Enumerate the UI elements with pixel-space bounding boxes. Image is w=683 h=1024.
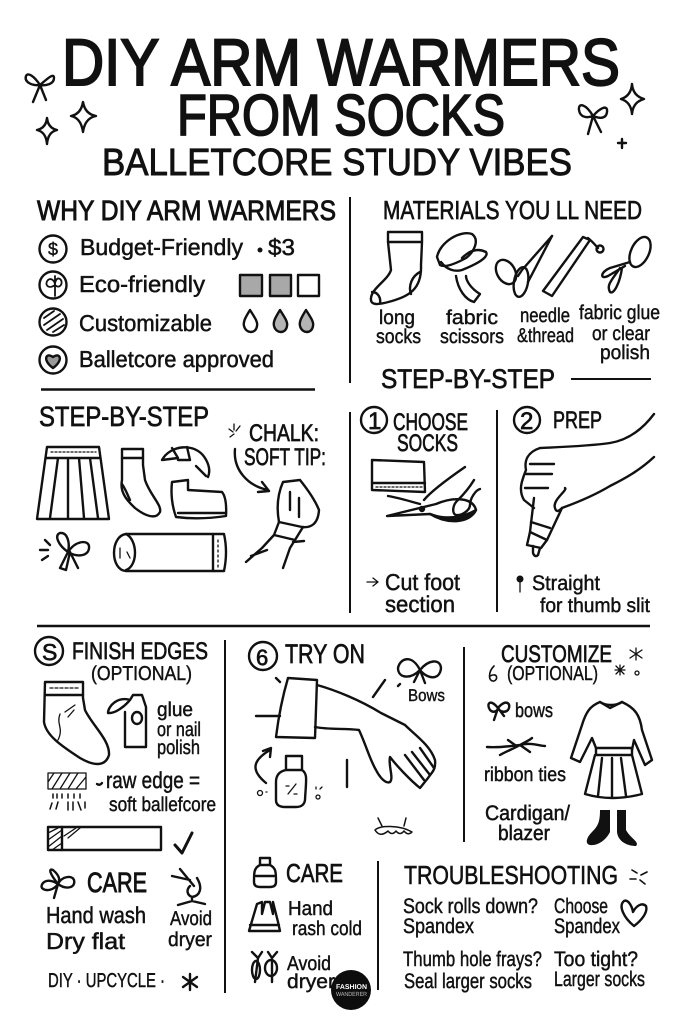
panel: step 6 try on — [249, 639, 445, 834]
heading: customize — [490, 641, 642, 685]
panel: step 2 prep — [514, 407, 654, 617]
text: avoid dryer middle: dryer — [287, 971, 335, 993]
icon: chalk note — [229, 420, 326, 471]
footer tag: diy upcycle: DIY · UPCYCLE · — [48, 970, 165, 992]
icon: sock outline — [122, 449, 160, 516]
icon: dots — [258, 787, 322, 799]
row: eco-friendly — [40, 271, 319, 298]
icon: hand squeezing bottle — [521, 414, 654, 556]
title: DIY ARM WARMERS — [62, 25, 620, 99]
badge: 5: S — [42, 639, 57, 665]
text: hand wash cold — [288, 898, 362, 940]
icon: bottle — [254, 858, 276, 887]
row: customizable — [40, 308, 313, 336]
icon: drying figure — [172, 869, 205, 905]
illustration: arm with warmer — [256, 678, 435, 788]
item: bows — [488, 700, 553, 722]
panel: step 5 finish edges — [35, 637, 216, 992]
icon: black socks — [587, 810, 637, 846]
text: raw edge: soft ballefcore — [109, 794, 216, 816]
text: sock rolls down — [403, 895, 538, 938]
labels: materials: long — [379, 307, 415, 329]
row: budget-friendly: $3 — [268, 234, 295, 260]
text: hand wash dry flat — [46, 902, 146, 954]
icon: hangers — [252, 952, 277, 982]
row: balletcore approved: Balletcore approved — [79, 346, 274, 372]
logo: fashion wanderer: WANDERER — [336, 991, 368, 998]
labels: materials: or clear — [592, 323, 650, 345]
label: ribbon ties: ribbon ties — [484, 764, 566, 786]
icon: nail polish bottle — [276, 756, 306, 807]
icon: rolled sock — [114, 534, 226, 571]
text: choose spandex: Spandex — [554, 915, 620, 938]
heading: choose socks: CHOOSE — [393, 409, 468, 436]
icon: scissors and hand — [387, 467, 480, 521]
panel: why diy arm warmers — [37, 195, 336, 374]
text: too tight: Too tight? — [554, 948, 638, 971]
icon: finished sleeve — [48, 827, 161, 850]
text: cut foot section: Cut foot — [385, 569, 461, 595]
badge: 6 — [249, 642, 277, 670]
badge: 2 — [514, 407, 540, 435]
text: straight for thumb slit — [516, 572, 650, 617]
heading: finish edges — [72, 638, 208, 685]
heading: step-by-step right: STEP-BY-STEP — [381, 364, 555, 394]
icon: cut sock piece — [372, 460, 425, 492]
badge: 2: 2 — [520, 408, 533, 435]
text: straight for thumb slit: Straight — [532, 572, 600, 595]
text: too tight — [554, 948, 645, 991]
icon: bow — [398, 659, 441, 683]
text: glue or nail polish: polish — [157, 737, 200, 759]
text: straight for thumb slit: for thumb slit — [540, 595, 650, 617]
panel: troubleshooting — [403, 860, 647, 993]
labels: materials: fabric glue — [579, 302, 660, 324]
title: FROM SOCKS — [177, 83, 505, 148]
heading: care left — [42, 867, 147, 898]
icon: ribbon ties — [487, 738, 545, 755]
panel: customize — [484, 641, 652, 846]
row: budget-friendly: Budget-Friendly — [80, 234, 244, 260]
text: thumb hole frays — [403, 948, 542, 993]
arrow: curved up — [255, 748, 271, 783]
icon: bow — [40, 533, 89, 570]
icon: sock — [44, 682, 109, 764]
text: raw edge — [97, 767, 216, 816]
row: customizable: Customizable — [79, 310, 212, 336]
text: hand wash dry flat: Hand wash — [46, 902, 146, 928]
text: glue or nail polish: glue — [157, 699, 193, 721]
text: choose spandex: Choose — [554, 895, 608, 918]
heading: finish edges: (OPTIONAL) — [91, 663, 192, 685]
logo: fashion wanderer — [331, 970, 371, 1010]
badge: 1: 1 — [368, 408, 381, 435]
text: avoid dryer middle — [287, 953, 335, 993]
text: too tight: Larger socks — [554, 968, 645, 991]
heading: try on: TRY ON — [285, 639, 365, 669]
icon: hand with cuff — [246, 480, 319, 568]
badge: 1 — [361, 407, 387, 435]
text: hand wash cold: Hand — [288, 898, 333, 920]
icon: bow top right — [579, 105, 607, 134]
labels: materials: polish — [600, 342, 650, 364]
heading: customize: CUSTOMIZE — [501, 641, 612, 668]
text: thumb hole frays: Thumb hole frays? — [403, 948, 542, 971]
icon: check — [175, 833, 192, 853]
heading: care left: CARE — [87, 867, 147, 898]
labels: materials: socks — [376, 326, 421, 348]
text: avoid dryer — [168, 908, 212, 951]
text: cut foot section: section — [385, 591, 455, 617]
icon: lace detail — [375, 818, 412, 834]
panel: materials — [371, 195, 660, 394]
row: eco-friendly: Eco-friendly — [79, 271, 206, 297]
label: cardigan blazer — [485, 802, 570, 845]
heading: step-by-step left: STEP-BY-STEP — [39, 401, 209, 432]
row: budget-friendly — [40, 234, 295, 262]
labels: materials: fabric — [446, 307, 498, 329]
icon: spray bottle — [108, 695, 146, 747]
heading: finish edges: FINISH EDGES — [72, 638, 208, 665]
badge: 5 — [35, 637, 63, 665]
label: cardigan blazer: blazer — [498, 822, 550, 845]
logo: fashion wanderer: FASHION — [336, 984, 367, 991]
heading: care middle: CARE — [286, 858, 343, 888]
icon: fabric glue — [602, 234, 655, 292]
label: cardigan blazer: Cardigan/ — [485, 802, 570, 825]
icon: needle — [543, 237, 604, 296]
text: choose spandex — [554, 895, 620, 938]
icon: dress — [571, 702, 652, 798]
panel: step 1 choose socks — [361, 407, 480, 617]
heading: why: WHY DIY ARM WARMERS — [37, 195, 336, 226]
title: BALLETCORE STUDY VIBES — [102, 142, 572, 184]
text: avoid dryer: Avoid — [170, 908, 212, 930]
title — [62, 25, 620, 184]
icon: sock — [371, 232, 422, 304]
icon: sparkles left — [37, 102, 96, 144]
text: raw edge: raw edge = — [106, 767, 200, 793]
label: bows: Bows — [408, 686, 445, 705]
arrow: chalk to hand — [235, 449, 269, 492]
icon: scissors — [492, 236, 552, 298]
text: glue or nail polish — [157, 699, 201, 759]
text: sock rolls down: Spandex — [403, 915, 474, 938]
icon: heart — [622, 901, 646, 926]
heading: customize: (OPTIONAL) — [507, 663, 598, 685]
text: hand wash dry flat: Dry flat — [46, 928, 126, 954]
text: avoid dryer: dryer — [168, 929, 212, 951]
icon: fold arcs — [162, 447, 209, 477]
icon: sparkles right — [618, 84, 644, 148]
labels: materials: scissors — [440, 326, 504, 348]
icon: raw edge swatch — [48, 773, 86, 810]
icon: sparks — [630, 870, 647, 884]
heading: choose socks: SOCKS — [397, 430, 458, 457]
text: avoid dryer middle: Avoid — [287, 953, 331, 975]
icon: bow top left — [26, 74, 54, 102]
icon: fabric ribbon — [437, 233, 487, 302]
labels: materials: &thread — [517, 325, 574, 347]
text: cut foot section — [367, 569, 461, 617]
icon: chalk note: SOFT TIP: — [244, 444, 326, 471]
heading: choose socks — [393, 409, 468, 457]
panel: care middle — [249, 858, 362, 993]
badge: 6: 6 — [256, 645, 268, 670]
text: glue or nail polish: or nail — [157, 719, 201, 741]
icon: chalk note: CHALK: — [249, 420, 319, 447]
icon: folded sock — [172, 480, 226, 518]
labels: materials — [376, 302, 660, 364]
item: bows: bows — [515, 700, 553, 722]
icon: bag — [249, 902, 280, 931]
heading: troubleshooting: TROUBLESHOOTING — [404, 860, 618, 890]
row: budget-friendly: $ — [48, 239, 58, 259]
icon: pleated skirt — [37, 447, 109, 519]
text: sock rolls down: Sock rolls down? — [403, 895, 538, 918]
labels: materials: needle — [520, 305, 570, 327]
text: hand wash cold: rash cold — [292, 918, 362, 940]
text: thumb hole frays: Seal larger socks — [404, 970, 532, 993]
panel: step-by-step left — [37, 401, 326, 571]
heading: prep: PREP — [553, 407, 602, 434]
